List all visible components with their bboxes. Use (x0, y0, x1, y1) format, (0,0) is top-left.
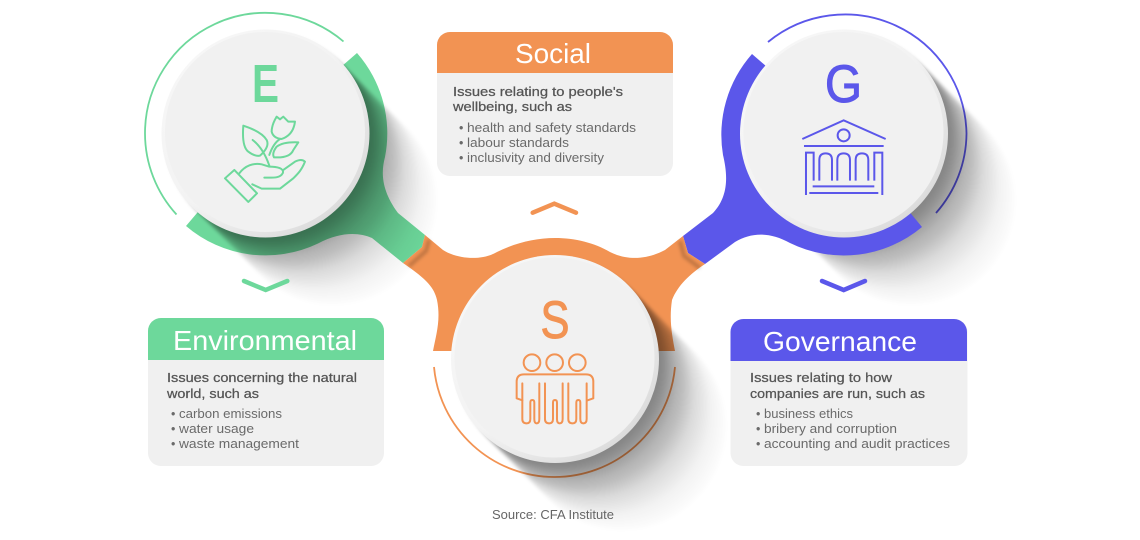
text: Governance description: companies are run, such as (750, 386, 926, 401)
list: Governance issues: business ethics (764, 407, 853, 421)
list: Environmental issues: • (171, 422, 175, 436)
circle: E (162, 30, 370, 238)
panel: Social (437, 32, 673, 176)
list: Social issues: • (459, 136, 463, 150)
icon: institution building (802, 120, 886, 195)
panel: S medallion ring and arms (403, 235, 726, 530)
list: Governance issues: bribery and corruption (764, 422, 897, 436)
list: Environmental issues: waste management (178, 437, 300, 451)
list: Environmental issues: • (171, 437, 175, 451)
list: Social issues: • (459, 151, 463, 165)
text: Environmental description (166, 370, 357, 401)
text: Social description: wellbeing, such as (452, 99, 573, 114)
list: Environmental issues: • (171, 407, 175, 421)
list: Social issues (459, 121, 636, 165)
source note: Source: CFA Institute (492, 508, 614, 522)
text: Social description: Issues relating to people's (453, 84, 624, 99)
list: Social issues: health and safety standards (467, 121, 636, 135)
list: Environmental issues: water usage (178, 422, 254, 436)
list: Environmental issues (171, 407, 300, 451)
list: Social issues: labour standards (467, 136, 569, 150)
arrow: governance chevron (822, 281, 865, 290)
letter: S: S (540, 291, 570, 350)
text: Environmental description: world, such as (166, 386, 260, 401)
heading: Social: Social (515, 38, 591, 69)
text: Governance description: Issues relating to how (750, 370, 893, 385)
arrow: social chevron (533, 204, 576, 213)
list: Governance issues: • (756, 437, 760, 451)
text: Social description (452, 84, 624, 114)
icon: group of people (517, 354, 593, 423)
list: Social issues: • (459, 121, 463, 135)
heading: Environmental: Environmental (173, 325, 357, 356)
panel: Environmental (148, 318, 384, 466)
text: Governance description (750, 370, 926, 401)
list: Environmental issues: carbon emissions (179, 407, 282, 421)
text: Environmental description: Issues concerning the natural (167, 370, 357, 385)
list: Governance issues: accounting and audit practices (764, 437, 950, 451)
panel: E medallion ring and arm (145, 13, 437, 305)
circle: S (451, 255, 659, 463)
heading: Governance: Governance (763, 326, 917, 357)
list: Governance issues (756, 407, 950, 451)
letter: E: E (252, 54, 279, 114)
circle: G (740, 30, 948, 238)
letter: G: G (825, 55, 862, 114)
arrow: environmental chevron (244, 281, 287, 290)
panel: G medallion ring and arm (683, 14, 1015, 304)
icon: hand holding plant (225, 117, 305, 202)
panel: Governance (730, 319, 968, 466)
list: Governance issues: • (756, 407, 760, 421)
list: Governance issues: • (756, 422, 760, 436)
list: Social issues: inclusivity and diversity (467, 151, 605, 165)
